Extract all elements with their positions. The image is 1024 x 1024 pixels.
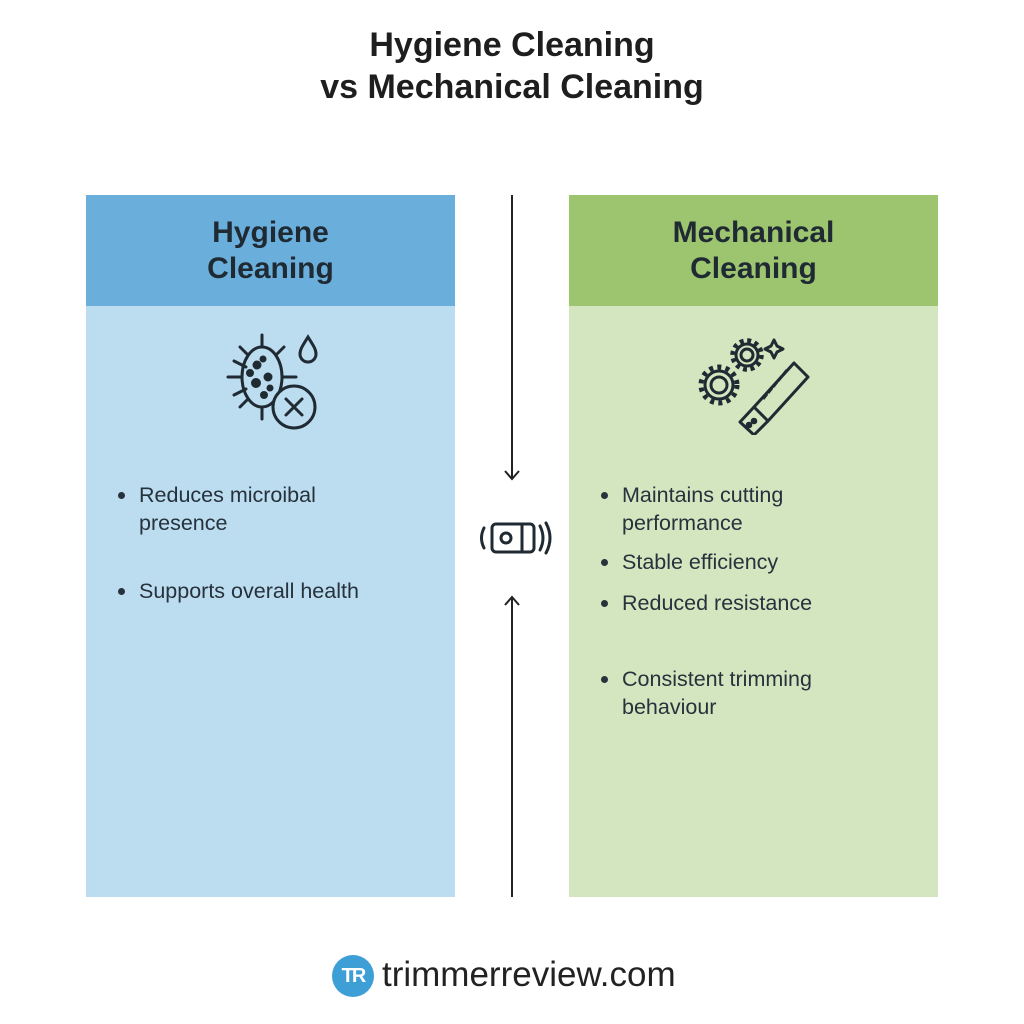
title: [320, 26, 704, 106]
heading: hygiene: Cleaning: [207, 252, 334, 284]
bullets: hygiene: Reduces microibal: [139, 483, 316, 507]
panel: hygiene: [86, 195, 455, 897]
heading: mechanical: [569, 195, 938, 306]
footer logo: [332, 955, 676, 997]
title: vs Mechanical Cleaning: [320, 68, 704, 106]
bullets: hygiene: presence: [139, 511, 227, 535]
heading: hygiene: Hygiene: [212, 216, 329, 248]
bullets: mechanical: Consistent trimming: [622, 667, 812, 691]
bullets: mechanical: [601, 483, 812, 719]
bullets: mechanical: performance: [622, 511, 743, 535]
icon: bacteria: [226, 334, 318, 430]
heading: mechanical: Cleaning: [690, 252, 817, 284]
title: Hygiene Cleaning: [369, 26, 655, 64]
arrow: up: [504, 596, 520, 897]
bullets: hygiene: [118, 483, 359, 603]
panel: mechanical: [569, 195, 938, 897]
heading: mechanical: Mechanical: [673, 216, 834, 248]
heading: hygiene: [86, 195, 455, 306]
icon: device: [480, 521, 552, 555]
bullets: mechanical: Reduced resistance: [622, 591, 812, 615]
bullets: mechanical: behaviour: [622, 695, 716, 719]
bullets: mechanical: Maintains cutting: [622, 483, 783, 507]
bullets: mechanical: Stable efficiency: [622, 550, 778, 574]
arrow: down: [504, 195, 520, 480]
bullets: hygiene: Supports overall health: [139, 579, 359, 603]
icon: TR logo: TR: [342, 965, 364, 987]
icon: TR logo: [332, 955, 374, 997]
icon: gears and blade: [698, 338, 810, 435]
footer text: trimmerreview.com: [382, 955, 676, 994]
